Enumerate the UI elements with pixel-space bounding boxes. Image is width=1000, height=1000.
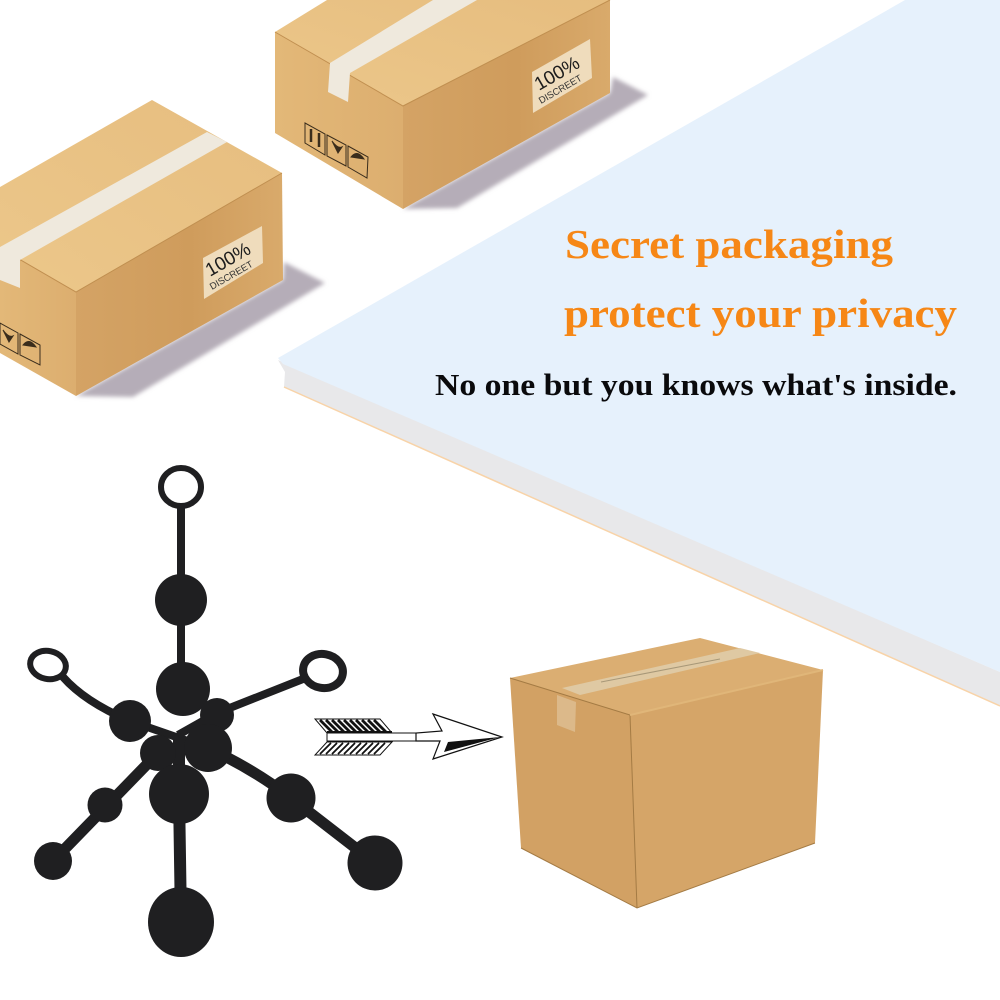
label: 100% discreet [202, 226, 263, 299]
fletching [315, 719, 392, 733]
product: black silicone beads [27, 468, 403, 957]
arrow [315, 714, 502, 759]
box: large cardboard box [510, 638, 823, 908]
arrowhead [416, 714, 502, 759]
tape [328, 0, 477, 102]
icons: handling symbols [305, 123, 368, 178]
label: 100% discreet: 100% [202, 239, 255, 281]
label: 100% discreet: 100% [531, 53, 584, 95]
label: 100% discreet: DISCREET [208, 259, 255, 293]
text: tagline: No one but you knows what's inside. [435, 367, 957, 402]
box: top cardboard box [275, 0, 648, 209]
label: 100% discreet [531, 39, 592, 113]
heading: secret packaging: Secret packaging [565, 221, 894, 267]
box: left cardboard box [0, 100, 325, 397]
tape [0, 132, 227, 288]
tape [562, 648, 760, 695]
heading: protect your privacy: protect your privacy [564, 290, 958, 336]
label: 100% discreet: DISCREET [537, 73, 584, 107]
icons: handling symbols [0, 323, 40, 365]
panel: blue sheet [278, 0, 1000, 706]
